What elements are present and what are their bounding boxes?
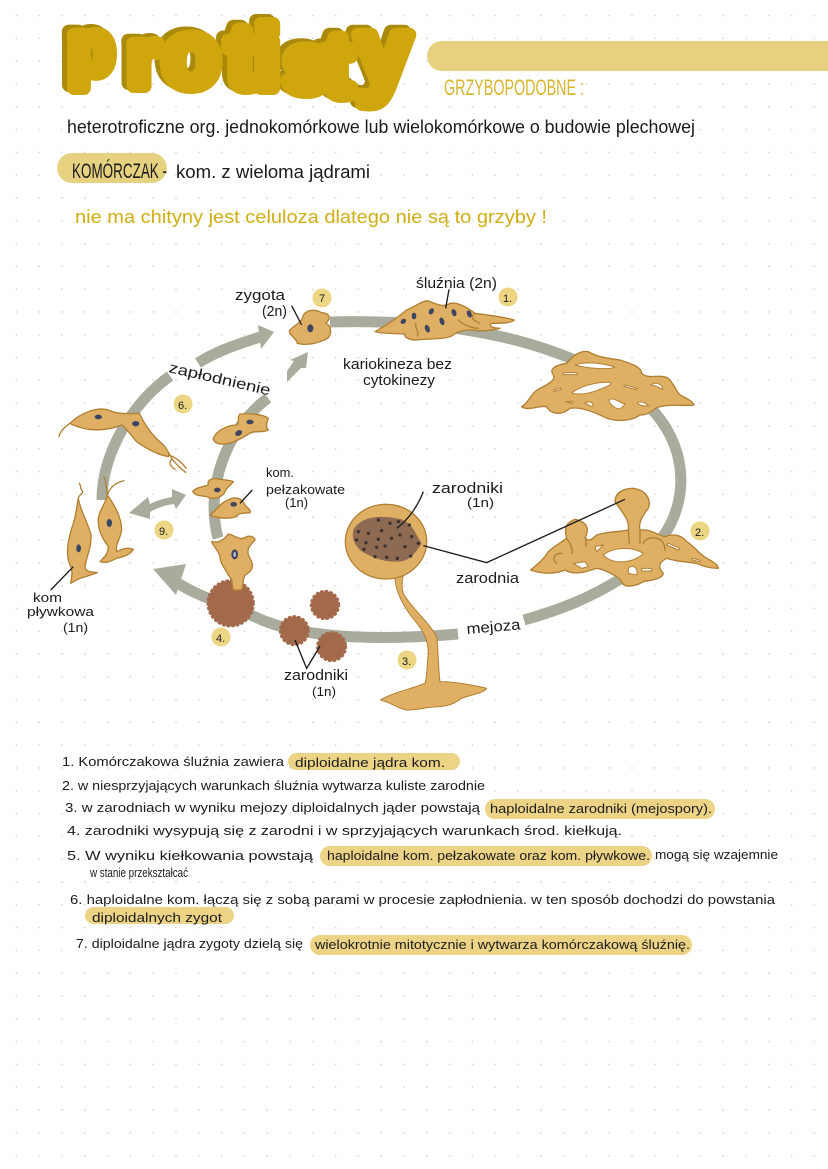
title: o <box>163 4 219 106</box>
spore upper <box>311 591 339 619</box>
diagram labels: kom. <box>266 465 294 480</box>
life cycle ring <box>102 322 681 637</box>
diagram labels: zarodnia <box>456 570 520 587</box>
numbered notes: 3. w zarodniach w wyniku mejozy diploidalnych jąder powstają <box>65 800 481 815</box>
title: p <box>64 6 108 86</box>
diagram labels: zarodniki <box>432 480 503 497</box>
swimming cell B <box>98 477 133 562</box>
numbered notes: wielokrotnie mitotycznie i wytwarza komórczakową śluźnię. <box>314 937 690 952</box>
spore pointer <box>295 640 320 668</box>
numbered notes <box>62 753 778 955</box>
diagram labels: kom <box>33 590 62 605</box>
stage badges: 2. <box>695 527 704 539</box>
zygote <box>289 310 331 344</box>
title: o <box>158 1 214 103</box>
diagram labels: zapłodnienie <box>167 359 272 399</box>
diagram labels: zygota <box>235 287 286 304</box>
spore lower left <box>280 617 308 645</box>
title: i <box>250 5 274 104</box>
pointer swimming cell <box>51 567 73 590</box>
note: nie ma chityny jest celuloza dlatego nie są to grzyby ! <box>75 207 547 227</box>
numbered notes: mogą się wzajemnie <box>655 847 778 862</box>
sporangia pointers <box>423 499 625 563</box>
numbered notes: 2. w niesprzyjających warunkach śluźnia wytwarza kuliste zarodnie <box>62 778 485 793</box>
stage badges: 3. <box>402 656 411 668</box>
diagram labels: (2n) <box>262 303 287 320</box>
komórczak term <box>57 153 370 183</box>
numbered notes: 1. Komórczakowa śluźnia zawiera <box>62 754 285 769</box>
amoeba pair <box>213 414 268 444</box>
diagram labels <box>27 275 522 699</box>
subtitle: GRZYBOPODOBNE : <box>444 75 584 100</box>
title <box>64 0 410 114</box>
diagram labels: (1n) <box>285 495 308 510</box>
title: p <box>69 9 113 89</box>
amoeba two <box>210 498 250 518</box>
numbered notes: diploidalne jądra kom. <box>295 755 445 770</box>
title: s <box>279 16 324 105</box>
title: t <box>227 7 256 106</box>
numbered notes: diploidalnych zygot <box>92 910 222 925</box>
numbered notes: 7. diploidalne jądra zygoty dzielą się <box>76 936 303 951</box>
numbered notes: haploidalne zarodniki (mejospory). <box>490 801 712 816</box>
germinating amoeba <box>212 534 255 590</box>
title: t <box>323 15 352 114</box>
right cells <box>345 289 718 710</box>
numbered notes: haploidalne kom. pełzakowate oraz kom. pływkowe. <box>327 848 650 863</box>
slime mold net <box>522 351 694 420</box>
stage badges: 4. <box>216 633 225 645</box>
left cells <box>51 306 346 668</box>
swimming cell A <box>68 483 97 583</box>
stage badges: 7 <box>319 293 325 305</box>
diagram labels: pływkowa <box>27 604 95 619</box>
diagram labels: cytokinezy <box>363 372 436 389</box>
stage badges <box>154 288 710 670</box>
title: t <box>222 4 251 103</box>
numbered notes: w stanie przekształcać <box>89 865 188 880</box>
title: r <box>123 11 154 100</box>
diagram labels: (1n) <box>312 684 336 699</box>
fused gametes <box>59 409 186 472</box>
slime mold one <box>375 301 514 340</box>
sporangium <box>345 504 487 710</box>
numbered notes: 5. W wyniku kiełkowania powstają <box>67 848 314 863</box>
diagram labels: kariokineza bez <box>343 356 452 373</box>
diagram labels: zarodniki <box>284 667 348 684</box>
pointer amoeba <box>240 490 252 503</box>
title bar <box>427 41 828 71</box>
title: i <box>255 8 279 107</box>
komórczak term: kom. z wieloma jądrami <box>176 162 370 182</box>
spore lower right <box>318 633 346 661</box>
diagram labels: pełzakowate <box>266 482 345 497</box>
stage badges: 9. <box>159 526 168 538</box>
title: y <box>357 0 410 106</box>
pointer slime <box>446 289 449 308</box>
title: r <box>128 14 159 103</box>
title: s <box>284 19 328 108</box>
title: t <box>318 12 347 111</box>
spore pointer <box>397 492 423 528</box>
numbered notes: 4. zarodniki wysypują się z zarodni i w sprzyjających warunkach środ. kiełkują. <box>67 823 622 838</box>
diagram labels: (1n) <box>467 495 494 510</box>
definition line: heterotroficzne org. jednokomórkowe lub wielokomórkowe o budowie plechowej <box>67 117 695 137</box>
diagram labels: (1n) <box>63 620 88 635</box>
diagram labels: śluźnia (2n) <box>416 275 497 292</box>
slime mold with sporangia <box>531 488 718 586</box>
numbered notes: 6. haploidalne kom. łączą się z sobą parami w procesie zapłodnienia. w ten sposób dochodzi do powstania <box>70 892 776 907</box>
pointer zygote <box>292 306 302 325</box>
amoeba one <box>193 479 233 498</box>
spore large <box>208 581 253 626</box>
diagram labels: mejoza <box>466 616 522 638</box>
stage badges: 1. <box>503 293 512 305</box>
title: y <box>352 0 405 103</box>
komórczak term: KOMÓRCZAK - <box>72 160 167 183</box>
stage badges: 6. <box>178 400 187 412</box>
